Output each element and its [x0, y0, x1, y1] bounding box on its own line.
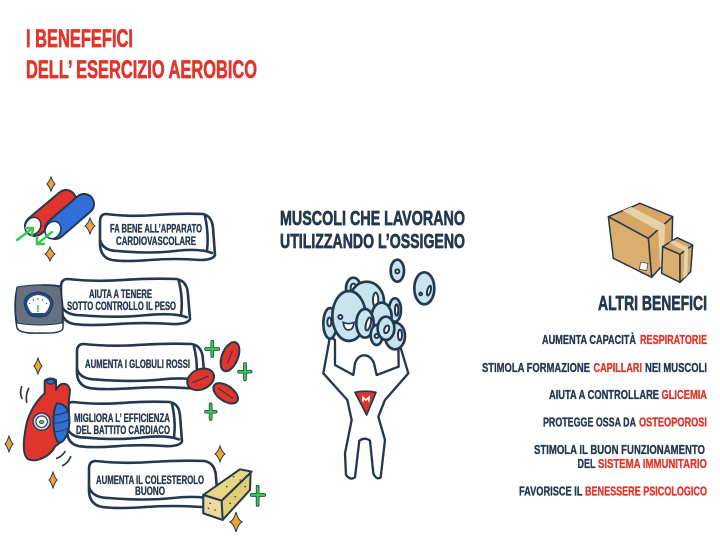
icon: sparkle	[5, 436, 13, 452]
card: cholesterol	[89, 461, 218, 508]
card: heart efficiency: MIGLIORA L’ EFFICIENZA	[74, 413, 170, 425]
title: I BENEFEFICI	[26, 25, 133, 53]
icon: sparkle	[230, 512, 242, 532]
card: heart efficiency: DEL BATTITO CARDIACO	[76, 425, 170, 437]
heading: muscles: UTILIZZANDO L’OSSIGENO	[280, 231, 465, 253]
title	[26, 25, 257, 84]
icon: sparkle	[49, 472, 57, 488]
item: wellbeing: FAVORISCE IL	[519, 484, 583, 498]
card: cardiovascular: CARDIOVASCOLARE	[116, 236, 196, 248]
icon: sparkle	[47, 177, 55, 191]
icon: heart	[21, 378, 71, 466]
item: immune system	[534, 443, 707, 471]
icon: sparkle	[34, 358, 42, 374]
muscle cell cluster	[323, 278, 405, 349]
card: weight: AIUTA A TENERE	[89, 289, 152, 301]
item: osteoporosis: PROTEGGE OSSA DA	[543, 416, 636, 430]
panel: left benefits	[5, 177, 264, 532]
list: other benefits	[482, 332, 707, 498]
figure body	[323, 337, 408, 479]
card: red cells: AUMENTA I GLOBULI ROSSI	[85, 359, 190, 371]
icon: butter block	[203, 469, 264, 520]
item: wellbeing	[519, 484, 707, 498]
card: weight: SOTTO CONTROLLO IL PESO	[67, 301, 176, 313]
card: cardiovascular	[100, 214, 215, 261]
card: cardiovascular: FA BENE ALL’APPARATO	[110, 224, 202, 236]
icon: sparkle	[85, 218, 95, 234]
shorts logo	[355, 391, 376, 415]
card: heart efficiency	[67, 402, 182, 447]
icon: sparkle	[215, 446, 225, 462]
floating cells	[391, 260, 434, 304]
card: cholesterol: AUMENTA IL COLESTEROLO	[96, 475, 204, 487]
item: glycemia: AIUTA A CONTROLLARE	[549, 388, 659, 402]
icon: sparkle	[45, 247, 55, 261]
icon: red blood cells	[184, 339, 251, 419]
card: red cells	[77, 344, 205, 389]
item: capillaries: STIMOLA FORMAZIONE	[482, 361, 590, 375]
item: capillaries: CAPILLARI	[594, 361, 642, 375]
title: DELL’ ESERCIZIO AEROBICO	[26, 56, 257, 84]
icon: blood vessels	[17, 200, 84, 244]
illustration: figure lifting muscle cells	[323, 260, 434, 479]
item: capillaries	[482, 361, 707, 375]
icon: cardboard boxes	[608, 203, 693, 282]
heading: muscles: MUSCOLI CHE LAVORANO	[280, 208, 465, 230]
item: respiratory: AUMENTA CAPACITÀ	[542, 332, 636, 347]
card: weight	[61, 279, 190, 325]
heading: muscles	[280, 208, 465, 253]
card: cholesterol: BUONO	[135, 486, 165, 498]
item: immune system: DEL	[578, 457, 596, 471]
icon: scale	[15, 285, 63, 333]
